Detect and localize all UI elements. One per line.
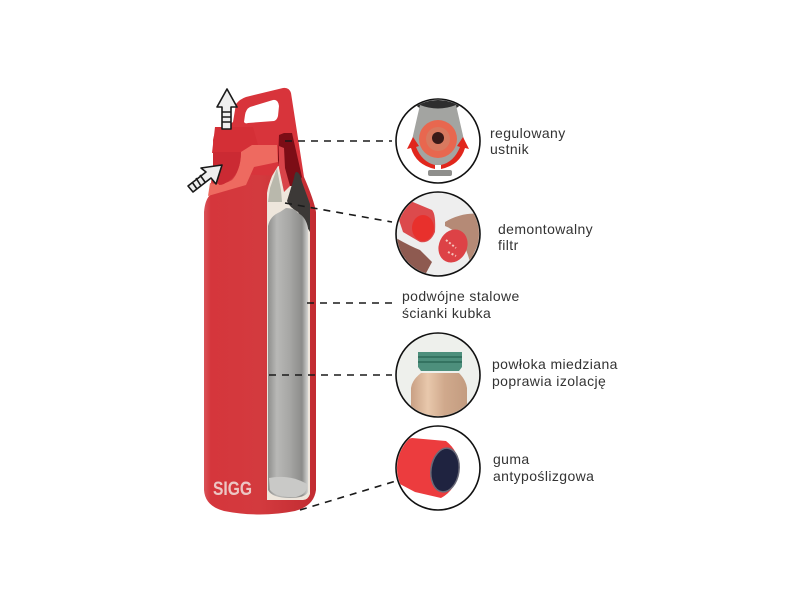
label: guma antypoślizgowa: guma <box>493 451 530 467</box>
label: podwójne stalowe ścianki kubka: ścianki kubka <box>402 305 491 321</box>
arrow: up <box>217 89 237 129</box>
label: regulowany ustnik: regulowany <box>490 125 566 141</box>
bottle handle <box>213 88 304 177</box>
cut-away window <box>267 166 310 500</box>
label: demontowalny filtr: demontowalny <box>498 221 593 237</box>
photo: adjustable mouthpiece <box>396 98 480 183</box>
steel neck <box>268 168 282 202</box>
label: regulowany ustnik: ustnik <box>490 141 530 157</box>
label: podwójne stalowe ścianki kubka: podwójne stalowe <box>402 288 520 304</box>
logo SIGG: SIGG <box>213 479 252 500</box>
arrow: press <box>188 165 222 192</box>
lid upper band <box>212 127 258 153</box>
steel liner <box>268 208 308 498</box>
insulating black wall <box>287 172 310 232</box>
label: powłoka miedziana poprawia izolację: powłoka miedziana <box>492 356 618 372</box>
label: powłoka miedziana poprawia izolację: poprawia izolację <box>492 373 606 389</box>
spout cut-away <box>278 133 302 186</box>
label: guma antypoślizgowa: antypoślizgowa <box>493 468 594 484</box>
bottle <box>204 88 316 514</box>
lid coral collar <box>208 145 278 196</box>
label: demontowalny filtr: filtr <box>498 237 519 253</box>
liner base <box>269 477 307 497</box>
dashed leader lines <box>269 141 398 510</box>
lid button <box>213 152 241 185</box>
photo: anti-slip rubber base <box>394 426 480 510</box>
infographic: bottle cross-section <box>187 88 618 514</box>
photo: copper coating <box>396 333 480 420</box>
spout inner <box>279 146 290 192</box>
bottle body <box>204 172 316 514</box>
photo: removable filter <box>396 192 480 276</box>
